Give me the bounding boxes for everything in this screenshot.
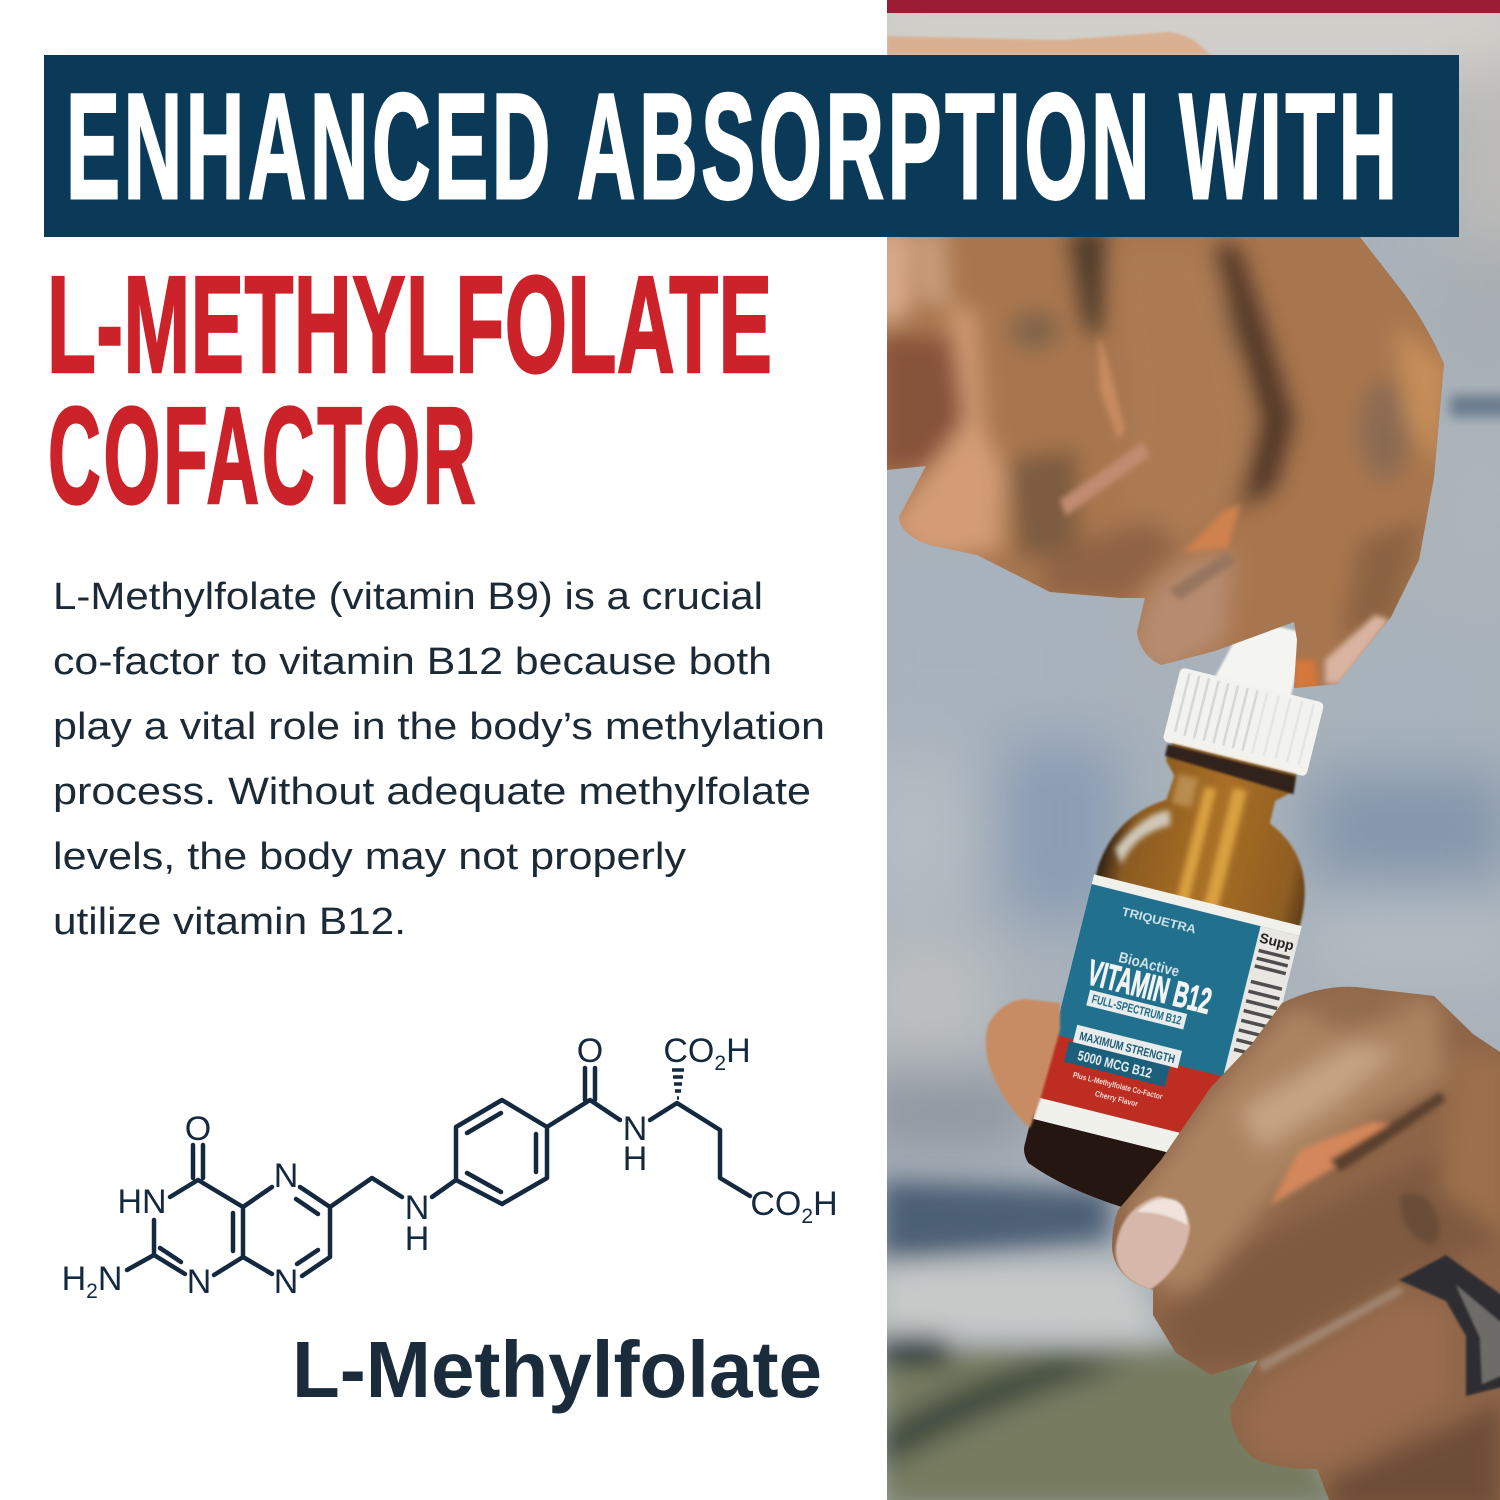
- body paragraph: co-factor to vitamin B12 because both: [53, 641, 772, 683]
- atom labels: H: [726, 1032, 751, 1070]
- molecule bonds: [127, 1068, 750, 1276]
- label: [1033, 874, 1302, 1171]
- body paragraph: [53, 576, 825, 943]
- atom labels: 2: [714, 1052, 726, 1075]
- molecule caption: L-Methylfolate: [292, 1325, 822, 1414]
- L-Methylfolate molecular structure: [62, 1032, 838, 1303]
- atom labels: N: [187, 1263, 211, 1301]
- top maroon accent bar: [887, 0, 1500, 13]
- body paragraph: play a vital role in the body’s methylation: [53, 706, 825, 748]
- dropper bulb: [1214, 626, 1297, 695]
- label: MAXIMUM STRENGTH: [1078, 1029, 1176, 1066]
- dropper tube reflections: [1112, 772, 1248, 906]
- atom labels: O: [185, 1110, 211, 1148]
- finger crease slivers: [1098, 335, 1125, 440]
- atom labels: H: [62, 1260, 86, 1298]
- label: FULL-SPECTRUM B12: [1090, 992, 1183, 1028]
- red heading: L-METHYLFOLATE: [47, 247, 772, 401]
- thumbnail: [1116, 1196, 1190, 1290]
- label: BioActive: [1117, 949, 1181, 981]
- body paragraph: levels, the body may not properly: [53, 836, 686, 878]
- atom labels: 2: [86, 1280, 98, 1303]
- dark liquid base: [1024, 1111, 1166, 1207]
- amber glass shoulder and neck: [1094, 742, 1306, 926]
- lower hand and thumb holding the bottle: [1100, 980, 1500, 1500]
- atom labels: N: [98, 1260, 122, 1298]
- orange gap between thumb and finger: [1270, 1122, 1405, 1205]
- label: Plus L-Methylfolate Co-Factor: [1072, 1070, 1163, 1101]
- body paragraph: utilize vitamin B12.: [53, 901, 406, 943]
- label: TRIQUETRA: [1120, 904, 1198, 936]
- atom labels: N: [274, 1157, 298, 1195]
- atom labels: HN: [117, 1183, 167, 1221]
- atom labels: H: [623, 1140, 647, 1178]
- label: Cherry Flavor: [1094, 1089, 1139, 1109]
- atom labels: CO: [750, 1185, 801, 1223]
- label: VITAMIN B12: [1084, 951, 1216, 1022]
- dark glass lip: [1163, 744, 1298, 794]
- body paragraph: process. Without adequate methylfolate: [53, 771, 811, 813]
- atom labels: 2: [801, 1205, 813, 1228]
- stereo hash bond: [672, 1070, 684, 1098]
- body paragraph: L-Methylfolate (vitamin B9) is a crucial: [53, 576, 763, 618]
- atom labels: CO: [663, 1032, 714, 1070]
- label: Supp: [1258, 930, 1296, 954]
- ribbed white cap: [1162, 667, 1324, 777]
- atom labels: N: [405, 1189, 429, 1227]
- photo backdrop: blurred shirt and olive floor: [850, 0, 1500, 1500]
- atom labels: H: [813, 1185, 838, 1223]
- atom labels: O: [577, 1032, 603, 1070]
- upper hand pinching the dropper: [887, 237, 1444, 688]
- index finger behind bottle: [986, 999, 1060, 1128]
- atom labels: N: [623, 1110, 647, 1148]
- label: 5000 MCG B12: [1076, 1047, 1154, 1081]
- finger seen above the banner: [887, 32, 1210, 55]
- white background panel: [0, 0, 887, 1500]
- red heading: COFACTOR: [48, 379, 476, 533]
- title banner: ENHANCED ABSORPTION WITH: [66, 62, 1397, 230]
- product bottle, tilted: [1024, 626, 1324, 1207]
- red heading: [47, 247, 772, 533]
- wedding band: [1399, 1255, 1500, 1396]
- atom labels: [62, 1032, 838, 1303]
- atom labels: H: [405, 1220, 429, 1258]
- photo: hands holding the vitamin B12 dropper bottle: [850, 0, 1500, 1500]
- atom labels: N: [274, 1263, 298, 1301]
